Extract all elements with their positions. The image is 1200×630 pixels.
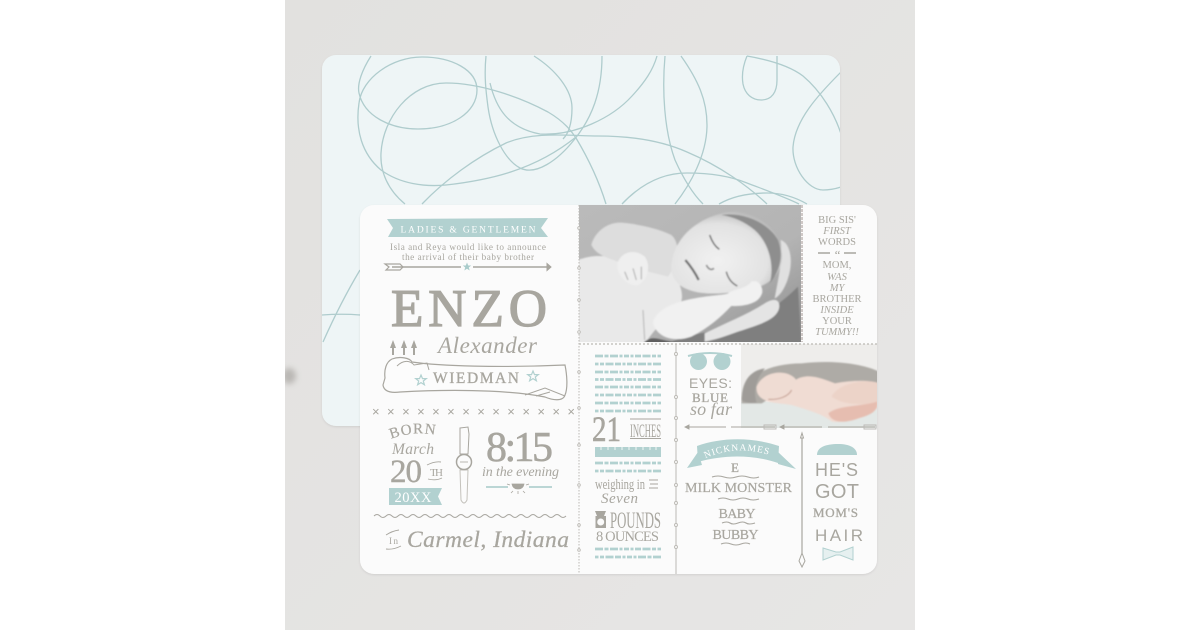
panel: big sister quote: MY bbox=[829, 283, 845, 294]
name: Enzo: ENZO bbox=[391, 280, 547, 338]
panel: mom's hair: HE'S bbox=[815, 460, 858, 480]
panel: birth date: 20 bbox=[390, 454, 422, 490]
quote mark with rules: “ bbox=[833, 247, 841, 262]
intro text bbox=[390, 242, 546, 262]
panel: big sister quote: INSIDE bbox=[819, 305, 854, 316]
arrows under photo bbox=[685, 425, 876, 429]
panel: mom's hair: HAIR bbox=[815, 526, 863, 545]
panel: big sister quote: WAS bbox=[827, 272, 848, 283]
length figure: 21 bbox=[592, 409, 621, 449]
icon: small ribbon bbox=[649, 480, 658, 488]
ounces: 8 OUNCES bbox=[596, 529, 659, 545]
arrow pattern rows, bottom bbox=[595, 549, 661, 557]
panel: big sister quote: BROTHER bbox=[812, 294, 862, 305]
panel: main photo, sleeping baby in hand bbox=[578, 205, 801, 347]
panel: birth time: in the evening bbox=[482, 465, 559, 480]
hand shadow bbox=[672, 287, 801, 342]
panel: eyes: BLUE bbox=[692, 390, 728, 405]
infographic canvas: INCHES bbox=[630, 421, 661, 442]
banner: ladies and gentlemen bbox=[387, 218, 548, 237]
icon: three trees bbox=[390, 340, 417, 355]
panel: nicknames: BUBBY bbox=[712, 528, 758, 543]
panel: small photo, sleeping newborn bbox=[741, 344, 879, 428]
icon: wristwatch bbox=[456, 427, 472, 503]
icon: bow tie bbox=[823, 547, 853, 560]
length unit bbox=[630, 419, 661, 442]
word: seven: Seven bbox=[601, 491, 638, 507]
intro text: Isla and Reya would like to announce bbox=[390, 242, 546, 252]
scribble lines bbox=[322, 56, 841, 342]
panel: birth time bbox=[482, 425, 559, 494]
panel: big sister quote: WORDS bbox=[818, 237, 856, 248]
arrow pattern rows, middle bbox=[595, 463, 661, 471]
banner: ladies and gentlemen: LADIES & GENTLEMEN bbox=[400, 226, 536, 236]
icon: comb bbox=[817, 444, 857, 455]
panel: big sister quote: FIRST bbox=[822, 226, 852, 237]
arrow with star bbox=[385, 262, 551, 270]
panel: nicknames: E bbox=[731, 460, 739, 475]
vertical arrow bbox=[799, 433, 805, 567]
intro text: the arrival of their baby brother bbox=[402, 252, 534, 262]
icon: star right bbox=[528, 371, 538, 381]
panel: big sister quote: TUMMY!! bbox=[815, 327, 859, 338]
marble background bbox=[282, 0, 915, 630]
ribbon with surname bbox=[383, 358, 567, 400]
panel: big sister quote bbox=[812, 215, 862, 338]
wavy divider bbox=[374, 514, 566, 518]
row of cross stitches: × × × × × × × × × × × × × × bbox=[372, 404, 575, 419]
icon: scale bbox=[595, 511, 606, 528]
panel: mom's hair bbox=[813, 444, 863, 560]
icon: sunglasses bbox=[688, 353, 732, 370]
panel: birth place: In bbox=[389, 536, 398, 546]
panel: birth date: March bbox=[391, 441, 434, 458]
year banner: 20XX bbox=[394, 490, 432, 506]
photo edge stitching bbox=[801, 205, 803, 342]
panel: birth place: Carmel, Indiana bbox=[407, 527, 569, 553]
panel: nicknames: MILK MONSTER bbox=[685, 481, 793, 496]
panel: birth date bbox=[388, 424, 443, 506]
middle name: Alexander: Alexander bbox=[436, 333, 538, 358]
icon: star left bbox=[416, 375, 426, 385]
panel: birth time: 8:15 bbox=[486, 425, 553, 471]
weighing in: weighing in bbox=[595, 477, 645, 493]
dotted panel dividers bbox=[578, 205, 877, 574]
panel: mom's hair: MOM'S bbox=[813, 505, 858, 520]
panel: mom's hair: GOT bbox=[815, 481, 859, 503]
panel: eyes bbox=[688, 353, 733, 419]
ordinal suffix: TH bbox=[430, 467, 443, 479]
front of card bbox=[360, 205, 877, 574]
panel: big sister quote: YOUR bbox=[822, 316, 852, 327]
icon: sun with arrows bbox=[486, 484, 552, 494]
ribbon with surname: WIEDMAN bbox=[433, 370, 519, 387]
panel: big sister quote: MOM, bbox=[823, 260, 851, 271]
banner: nicknames: NICKNAMES bbox=[703, 444, 769, 458]
panel: nicknames bbox=[685, 439, 796, 546]
panel: announcement heading bbox=[385, 218, 551, 270]
panel: eyes: so far bbox=[690, 399, 733, 419]
panel: birth date: BORN bbox=[388, 424, 436, 439]
infographic canvas bbox=[285, 0, 915, 630]
pounds: POUNDS bbox=[610, 508, 661, 533]
panel: length and weight bbox=[592, 356, 661, 557]
panel: big sister quote: BIG SIS' bbox=[818, 215, 856, 226]
arrow pattern rows, top bbox=[595, 356, 661, 411]
back of card with scribble pattern bbox=[322, 55, 841, 426]
panel: eyes: EYES: bbox=[689, 375, 732, 391]
panel: nicknames: BABY bbox=[718, 507, 756, 522]
icon: ruler bbox=[595, 447, 661, 457]
